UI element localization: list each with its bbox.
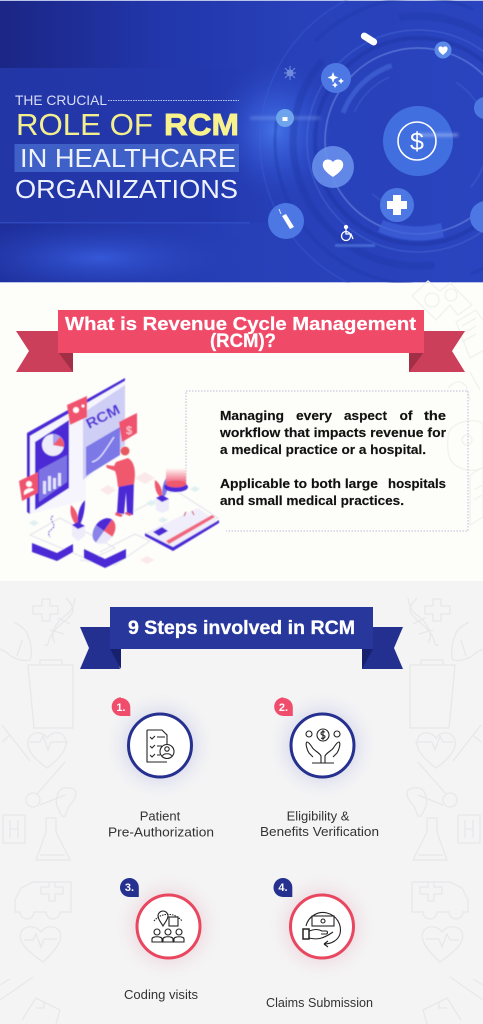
RCM panel: [83, 385, 125, 480]
badge 1: [112, 697, 130, 716]
icon: plus: [380, 188, 414, 222]
icon: hands and coins: [306, 729, 340, 763]
person: [106, 446, 135, 517]
title line 2: ROLE OF: [16, 107, 153, 142]
tag: dollar: [119, 413, 137, 442]
body text: Managing: [220, 408, 284, 423]
platform: right: [84, 549, 126, 568]
ribbon heading text: 9 Steps involved in RCM: [128, 618, 355, 639]
body text: Applicable to both large: [220, 476, 378, 491]
icon: location and coders: [152, 911, 184, 942]
dotted text box: [186, 391, 468, 531]
panel: what is RCM: [0, 281, 483, 581]
icon: lock: [250, 109, 320, 127]
title line 3: IN HEALTHCARE: [20, 143, 236, 173]
ribbon heading text: What is Revenue Cycle Management: [65, 314, 416, 334]
title line 1: THE CRUCIAL: [15, 92, 107, 108]
icon: pill: [360, 31, 378, 47]
tag: dollar: $: [126, 425, 132, 437]
step 4: [266, 870, 378, 1010]
ribbon heading text: (RCM)?: [210, 331, 276, 352]
badge 2: [274, 697, 293, 716]
label: Benefits Verification: [260, 824, 379, 839]
bar chart: [43, 473, 61, 494]
step 1: [104, 690, 216, 840]
ribbon: 9 steps: [80, 607, 403, 669]
badge 3: 3.: [125, 882, 134, 894]
tag: gear: [67, 396, 87, 425]
icon: cash in hand: [303, 913, 340, 947]
icon: syringe: [268, 203, 304, 239]
icon: shield: [434, 42, 452, 58]
plant: left: [70, 500, 85, 541]
body text: the: [424, 408, 446, 423]
pie chart: [42, 434, 64, 456]
label: Coding visits: [124, 987, 198, 1002]
title line 2: [16, 107, 239, 142]
icon: wheelchair: [342, 226, 353, 240]
label: Claims Submission: [266, 995, 373, 1010]
body text: a medical practice or a hospital.: [220, 442, 426, 457]
body text: [219, 408, 446, 508]
body text: and small medical practices.: [220, 493, 404, 508]
dashboard frame: [27, 378, 125, 514]
section background: steps: [0, 581, 483, 1024]
ribbon heading text: [65, 314, 416, 352]
title line 2: RCM: [164, 107, 239, 142]
dollar squiggle: [49, 516, 54, 537]
body text: aspect: [344, 408, 388, 423]
body text: hospitals: [388, 476, 446, 491]
icon: virus: [284, 66, 296, 80]
body text: every: [296, 408, 333, 423]
icon: sparkles: [321, 63, 351, 93]
section background: hero: [0, 0, 483, 300]
illustration: RCM dashboard: RCM: [83, 401, 122, 432]
badge 2: 2.: [279, 702, 288, 714]
center dollar icon: $: [410, 128, 424, 156]
tag: user: [19, 472, 38, 501]
floor grid: [30, 490, 218, 565]
title: [14, 92, 239, 204]
body text: workflow that impacts revenue for: [219, 425, 446, 440]
label: Patient: [140, 808, 181, 824]
label: Eligibility &: [287, 808, 350, 824]
badge 1: 1.: [116, 702, 126, 714]
icon: checklist with user: [147, 730, 174, 762]
plant: right: [155, 475, 169, 513]
center dollar icon: [383, 106, 458, 176]
hero concentric rings: [260, 0, 483, 299]
ribbon: what is RCM: [16, 310, 465, 372]
icons: right edge circles: [470, 97, 483, 233]
title line 4: ORGANIZATIONS: [15, 174, 238, 204]
icon: heart: [312, 146, 354, 188]
platform: left: [32, 543, 73, 561]
label: Pre-Authorization: [108, 824, 214, 840]
step 2: [260, 690, 379, 839]
glowing cylinder: [164, 468, 188, 492]
body text: of: [400, 408, 413, 423]
badge 4: 4.: [278, 882, 288, 894]
left dark panel: [35, 420, 69, 510]
floor pie chart: [88, 514, 120, 548]
credit card: [145, 508, 219, 551]
illustration: RCM dashboard: [19, 378, 219, 568]
step 3: [112, 870, 224, 1002]
